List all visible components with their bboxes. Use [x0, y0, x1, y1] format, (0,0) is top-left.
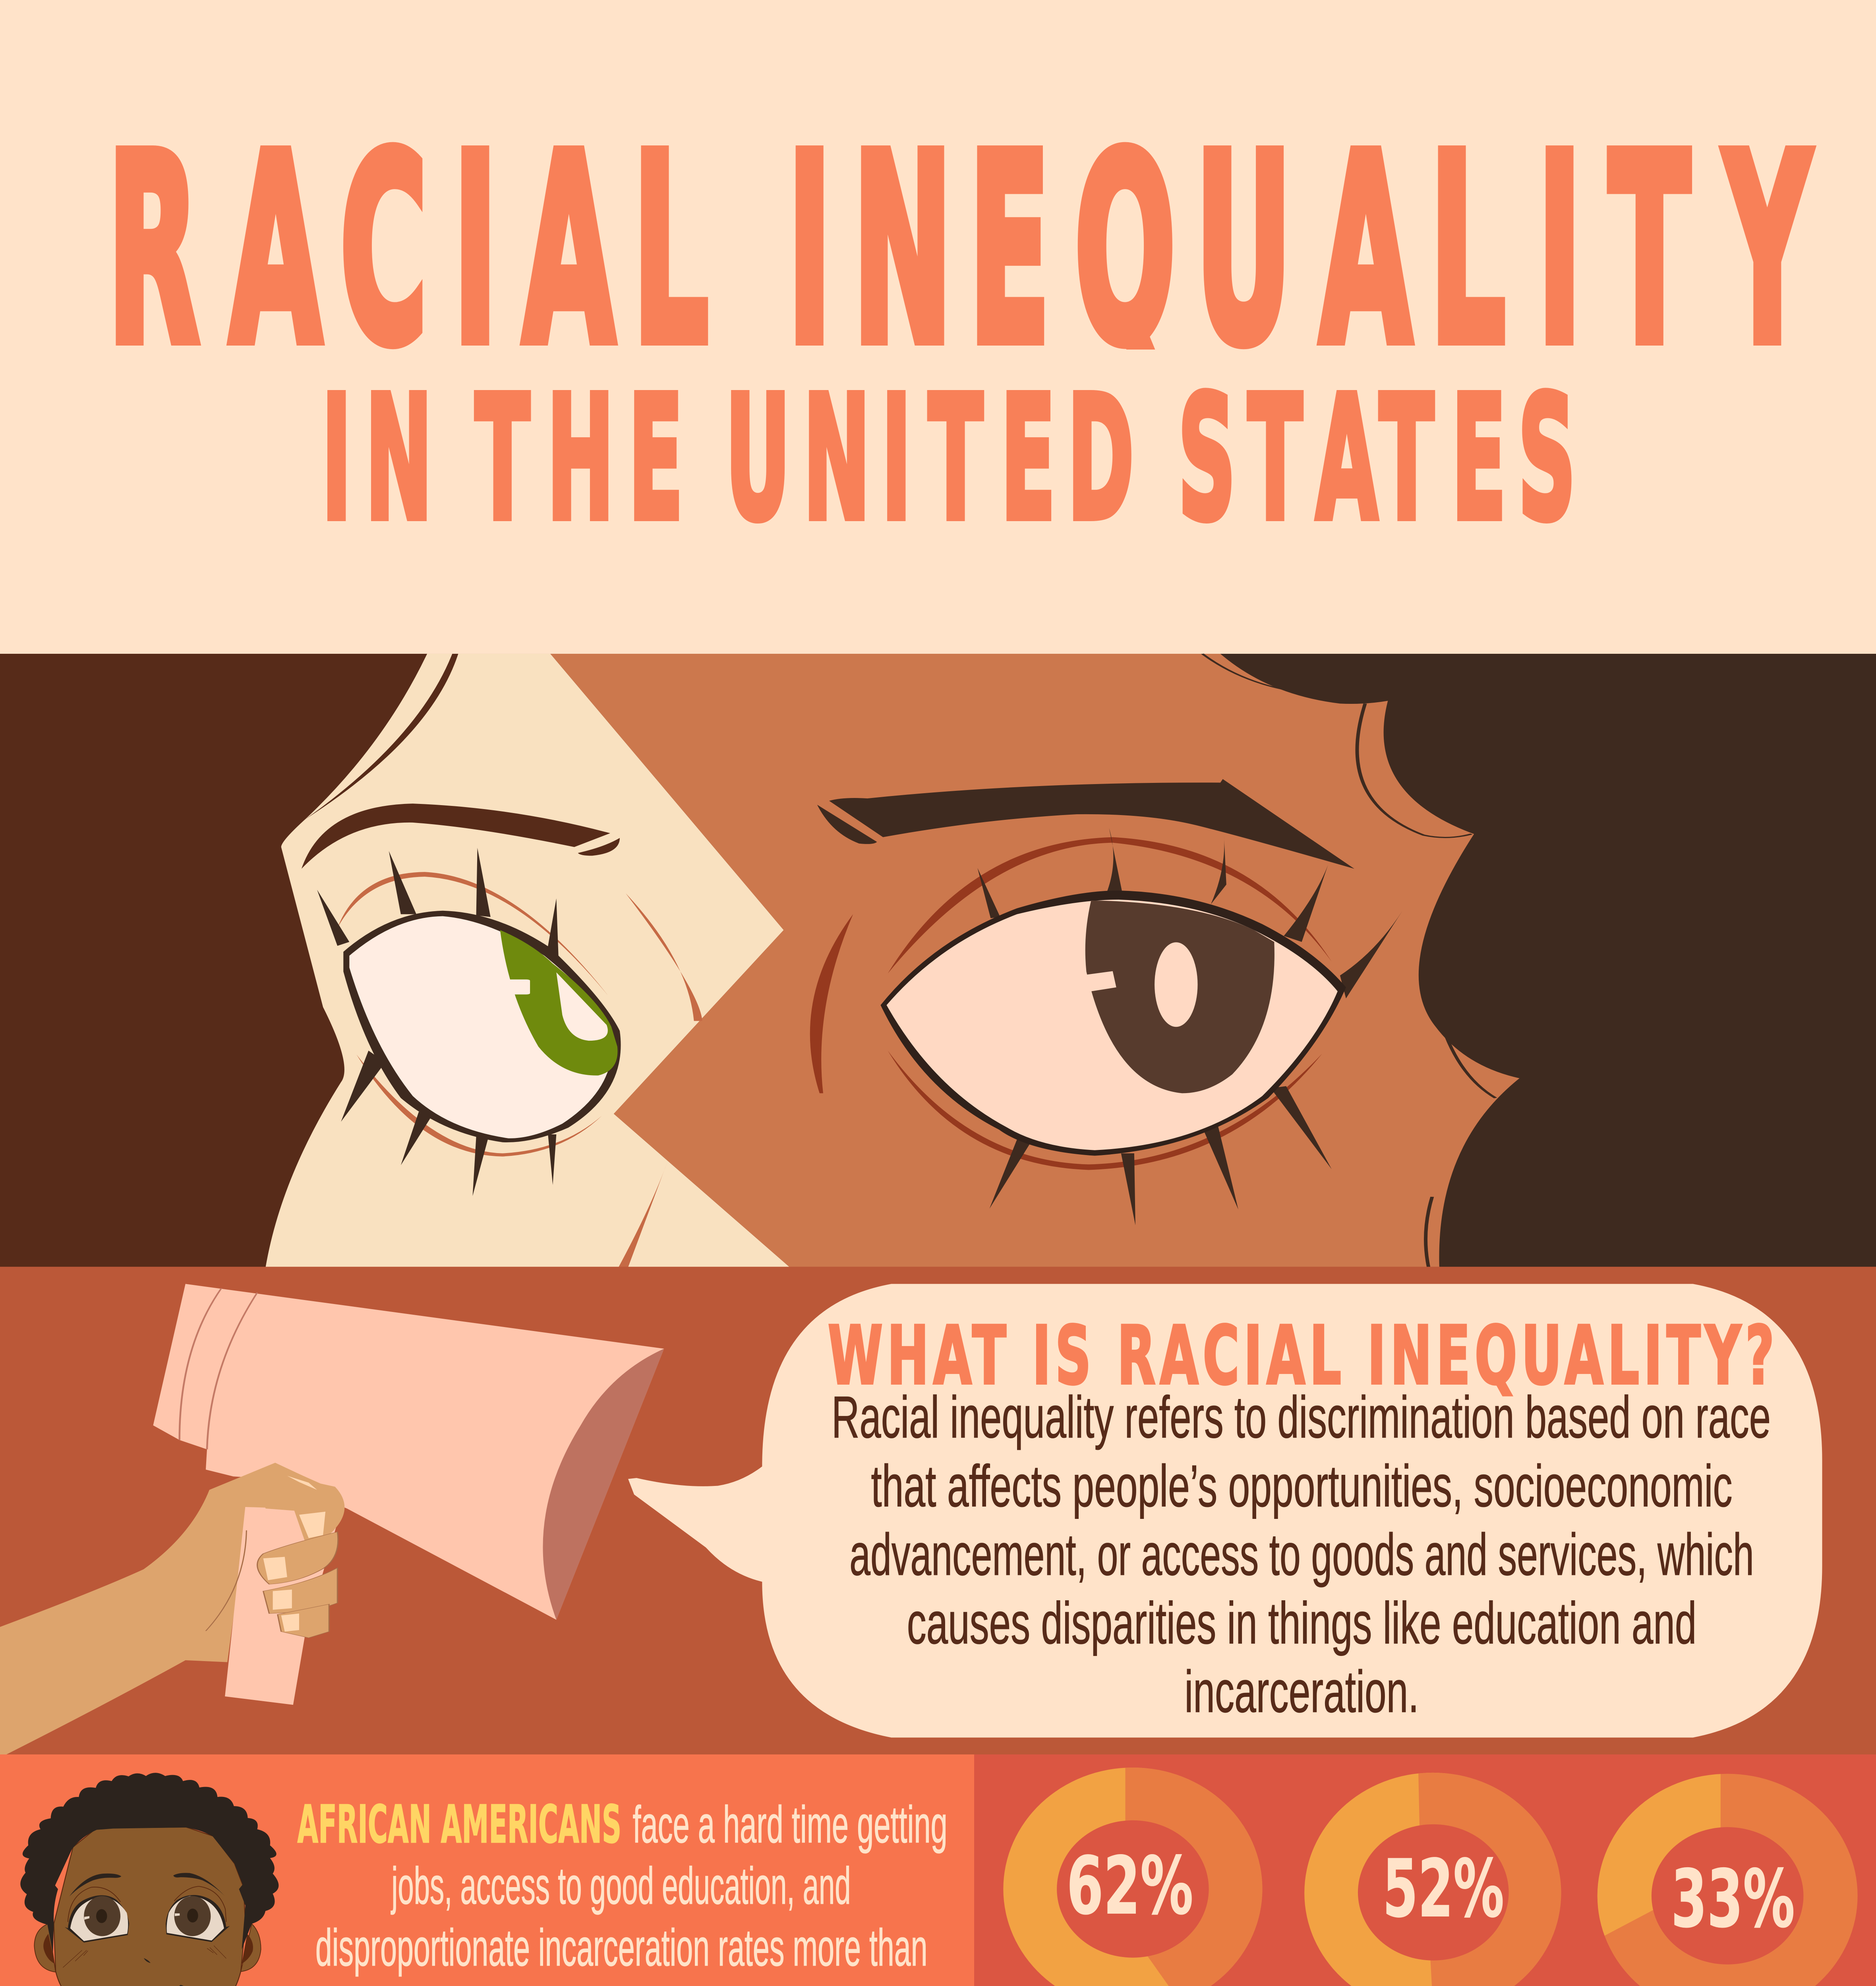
- text: african americans: [297, 1794, 948, 1986]
- heading: racial inequality: RACIAL INEQUALITY: [108, 100, 1812, 401]
- right eyebrow: [817, 779, 1354, 869]
- panel: statistics: [1003, 1748, 1862, 1986]
- left iris: [500, 930, 618, 1076]
- speech bubble: [628, 1284, 1822, 1737]
- megaphone rim lines: [180, 1288, 257, 1449]
- heading: what is racial inequality: WHAT IS RACIAL INEQUALITY?: [828, 1309, 1774, 1403]
- text: african americans: disproportionate incarceration rates more than: [315, 1919, 928, 1977]
- left eye: [343, 911, 621, 1142]
- left eye arcs: [337, 872, 702, 1267]
- chart: 52 percent donut: 52%: [1383, 1843, 1504, 1935]
- text: african americans: AFRICAN AMERICANS: [297, 1794, 621, 1855]
- title: [108, 100, 1812, 558]
- text: african americans: face a hard time getting: [632, 1796, 948, 1854]
- heading: in the united states: IN THE UNITED STATES: [322, 360, 1576, 558]
- right iris: [1085, 900, 1275, 1093]
- hand fingers: [257, 1463, 344, 1638]
- panel: megaphone section: [0, 1267, 1876, 1755]
- chart: 52 percent donut: [1304, 1772, 1561, 1986]
- panel: left background: [0, 1754, 974, 1986]
- left eye lashes: [317, 848, 559, 1196]
- left eyebrow: [302, 804, 620, 869]
- chart: 33 percent donut: [1597, 1774, 1858, 1986]
- icon: megaphone body: [153, 1284, 664, 1620]
- light skinned face: [266, 654, 790, 1267]
- arm: [0, 1463, 323, 1755]
- panel: right background: [974, 1754, 1876, 1986]
- chart: 33 percent donut: 33%: [1671, 1853, 1795, 1945]
- text block: groups: [72, 1794, 948, 1986]
- left face crease line: [305, 654, 458, 819]
- hair outline strokes: [1203, 654, 1495, 1267]
- right eye: [880, 891, 1346, 1156]
- hair: [1220, 654, 1876, 1267]
- text block: definition: [832, 1384, 1771, 1725]
- darker skinned face: [550, 654, 1876, 1267]
- panel: two eyes illustration: [0, 654, 1876, 1267]
- thumb crease: [206, 1530, 246, 1631]
- text: african americans: jobs, access to good education, and: [391, 1857, 851, 1915]
- megaphone opening shade: [543, 1349, 664, 1620]
- fingernail highlights: [263, 1476, 325, 1632]
- chart: 62 percent donut: [1003, 1768, 1263, 1986]
- megaphone handle: [225, 1507, 341, 1705]
- right eye lashes: [977, 828, 1402, 1225]
- chart: 62 percent donut: 62%: [1067, 1839, 1193, 1932]
- icon: african american face: [20, 1773, 278, 1986]
- right eye arcs: [810, 837, 1332, 1170]
